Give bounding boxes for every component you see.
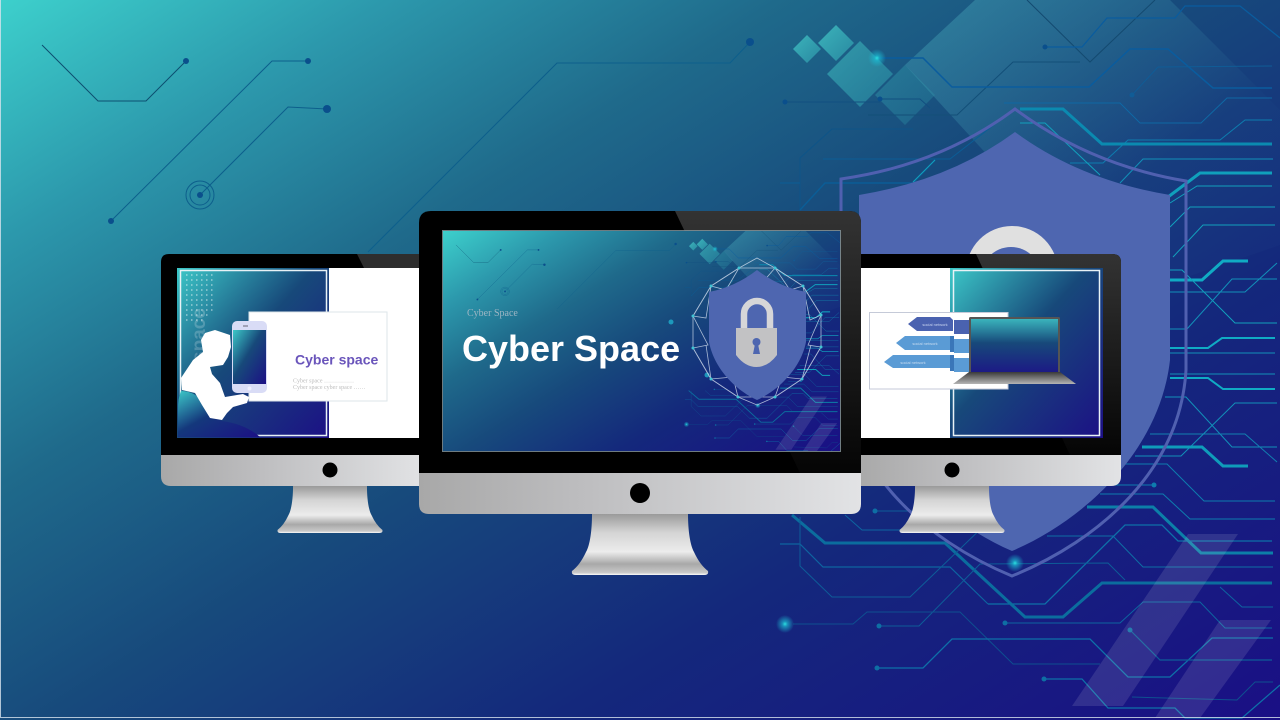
lock shackle [966,226,1058,318]
arrow row 3: social network [900,360,926,365]
heading: Cyber space [295,352,378,368]
chair [178,391,260,437]
slide subtitle: Cyber Space [467,308,518,319]
center monitor [419,211,861,575]
stand [900,486,1004,533]
stand [278,486,382,533]
arrow row 3 [884,355,974,372]
slide title: Cyber Space [462,328,680,369]
arrow row 2: social network [912,341,938,346]
bezel [855,254,1121,455]
person silhouette [181,330,249,420]
screen dots [668,320,710,378]
bezel [419,211,861,473]
teal panel [950,268,1103,438]
gloss [357,254,425,268]
stand [572,514,708,575]
lock shield [709,270,806,400]
bezel [161,254,425,455]
camera [630,483,650,503]
arrow row 1: social network [922,322,948,327]
net around shield [692,258,822,405]
camera [944,462,960,478]
left monitor [161,254,425,533]
shield outline [841,109,1186,576]
card [249,312,387,401]
gloss [976,254,1121,455]
arrow row 2 [896,336,974,353]
camera [322,462,338,478]
caption [293,378,366,391]
chin [855,450,1121,486]
gloss [675,211,861,473]
caption: Cyber space …………… [293,378,354,384]
arrow row 1 [908,317,974,334]
card [870,312,1008,389]
blue panel [177,268,329,438]
shield body [859,132,1170,551]
chin [161,450,425,486]
slide [177,268,422,438]
slide [855,268,1103,438]
vertical label: space [189,308,210,362]
right monitor [855,254,1121,533]
laptop [953,317,1076,384]
caption: Cyber space cyber space …… [293,385,366,391]
dot grid [186,275,216,320]
large shield [841,109,1186,576]
screen [443,231,840,451]
padlock [736,301,777,367]
chin [419,465,861,514]
phone [232,321,267,393]
